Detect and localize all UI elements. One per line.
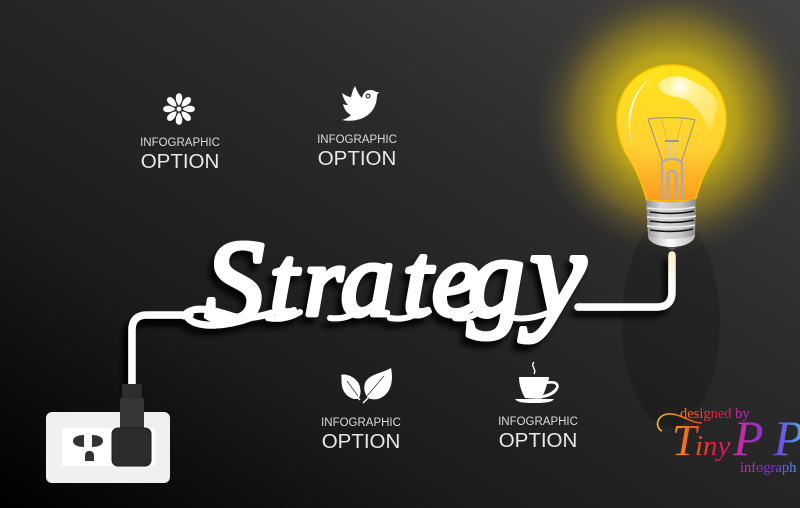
plug: [112, 384, 151, 466]
reflection: [658, 76, 717, 133]
icon: leaves: [341, 368, 392, 403]
option 3 label: INFOGRAPHIC: [321, 417, 401, 429]
bulb shadow: [622, 217, 720, 427]
title: Strategy: t: [270, 226, 300, 337]
option 3 label: [321, 417, 401, 453]
light bulb: [617, 65, 726, 250]
option 3 label: OPTION: [322, 430, 400, 453]
title: Strategy: e: [432, 221, 479, 338]
watermark: T: [672, 416, 700, 465]
title: Strategy: S: [205, 216, 264, 347]
option 1 label: OPTION: [141, 150, 219, 173]
bulb glass: [617, 65, 726, 201]
base dome: [648, 235, 695, 247]
option 1 label: INFOGRAPHIC: [140, 137, 220, 149]
title: Strategy: r: [304, 226, 344, 337]
watermark: [657, 406, 800, 476]
option 4 label: INFOGRAPHIC: [498, 416, 578, 428]
bulb glow: [534, 0, 800, 256]
icon: coffee cup: [515, 362, 559, 403]
option 2 label: INFOGRAPHIC: [317, 134, 397, 146]
power socket: [46, 412, 170, 483]
option 2 label: OPTION: [318, 147, 396, 170]
title: Strategy: g: [468, 216, 524, 340]
option 2 label: [317, 134, 397, 170]
cord: plug side: [132, 315, 190, 386]
left highlight: [629, 77, 652, 146]
option 4 label: [498, 416, 578, 452]
option 1 label: [140, 137, 220, 173]
watermark: infograph: [740, 460, 797, 476]
cord and Strategy wordmark: [132, 205, 672, 386]
screw base: [646, 199, 696, 239]
swash: [657, 414, 702, 431]
icon: flower: [163, 93, 195, 125]
script connectors: [184, 309, 272, 325]
cord: bulb side: [578, 255, 672, 307]
option 4 label: OPTION: [499, 429, 577, 452]
cord left shadow: [128, 321, 178, 392]
watermark: iny: [695, 430, 731, 462]
title: Strategy: a: [341, 221, 394, 338]
icon: bird: [342, 86, 379, 121]
watermark: designed by: [680, 406, 750, 422]
title: Strategy: t: [403, 223, 434, 338]
tip: [667, 247, 677, 250]
filament: [648, 116, 695, 200]
title: Strategy: y: [519, 205, 586, 343]
